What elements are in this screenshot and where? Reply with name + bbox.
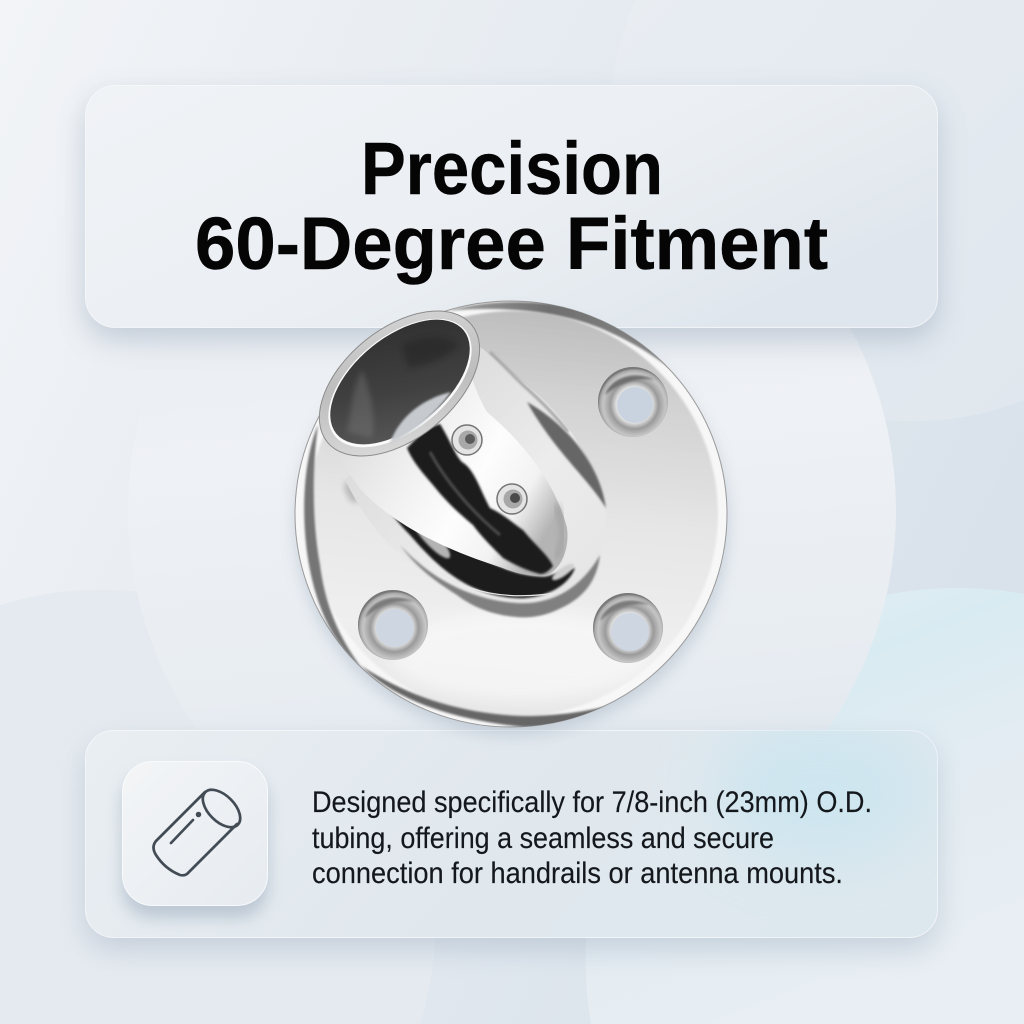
description text: connection for handrails or antenna mounts.: [312, 857, 843, 890]
description text: tubing, offering a seamless and secure: [312, 822, 774, 855]
screw: upper: [452, 425, 482, 455]
hole: lower left: [358, 590, 428, 660]
panel: description: [85, 720, 938, 950]
screw: lower: [497, 484, 527, 514]
icon tile: tube: [122, 762, 268, 918]
mounting holes: [358, 367, 668, 663]
set screws: [452, 425, 527, 514]
icon: tube outline: [154, 783, 247, 875]
product: stainless steel flange: [293, 282, 728, 734]
base disc: [295, 301, 727, 727]
hole: lower right: [593, 593, 663, 663]
title text: [195, 127, 828, 285]
title text: Precision: [361, 127, 663, 210]
title text: 60-Degree Fitment: [195, 202, 828, 285]
tube body: [337, 378, 568, 576]
tube foot: [345, 345, 606, 617]
tube mouth: [293, 282, 506, 485]
description text: [312, 786, 872, 890]
panel: title: [85, 86, 938, 340]
hole: upper right: [598, 367, 668, 437]
disc shadow: [296, 314, 728, 734]
description text: Designed specifically for 7/8-inch (23mm) O.D.: [312, 786, 872, 819]
